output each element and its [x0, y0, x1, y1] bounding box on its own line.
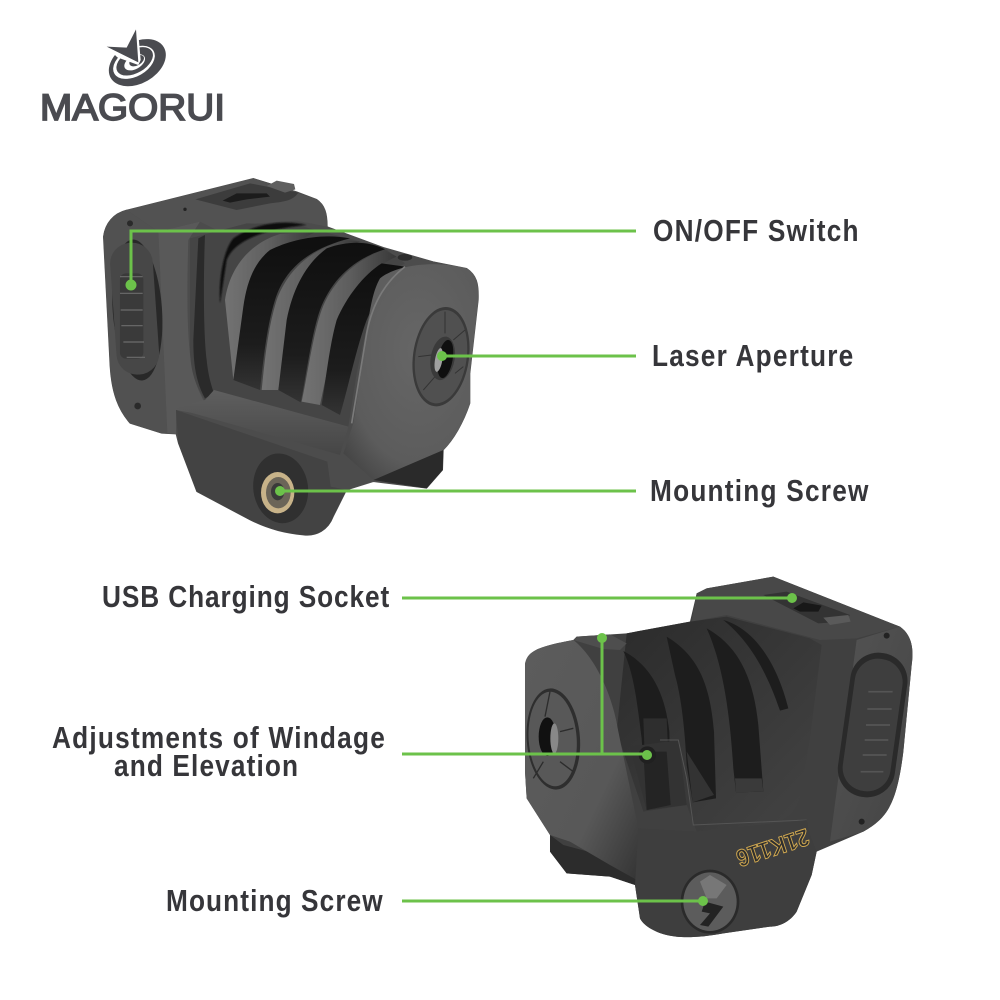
label: Adjustments of Windage and Elevation: Adjustments of Windage [52, 721, 385, 756]
callout: top mounting screw line [276, 488, 636, 494]
mounting screw [249, 450, 313, 527]
device: top laser view [103, 178, 478, 535]
front face [343, 264, 478, 480]
label: Mounting Screw top: Mounting Screw [650, 474, 869, 509]
left side panel [103, 210, 167, 433]
model marking 21K116: 21K116 [733, 823, 812, 871]
callout lines [127, 231, 796, 904]
top adjustment screw [398, 254, 412, 261]
base band [176, 390, 348, 455]
rail fins [220, 223, 405, 415]
logo target icon [100, 29, 174, 96]
side screws [127, 220, 141, 409]
body silhouette [525, 577, 912, 937]
label: Adjustments of Windage and Elevation [52, 721, 385, 784]
panel edge highlight [158, 222, 213, 434]
adjustment screw [630, 740, 687, 810]
logo wordmark: MAGORUI [40, 87, 225, 128]
top plate with USB cover [692, 577, 900, 640]
callout: USB socket line [402, 594, 796, 602]
face edge line [352, 267, 405, 423]
callout: ON/OFF switch line [127, 231, 636, 289]
label: Adjustments of Windage and Elevation: and Elevation [114, 749, 298, 784]
rail body [190, 223, 405, 427]
front face [525, 640, 640, 882]
label: USB Charging Socket: USB Charging Socket [102, 580, 390, 615]
side screws [859, 633, 890, 825]
logo: MAGORUI [40, 29, 225, 128]
top plate with USB cover [127, 178, 327, 237]
laser aperture [406, 303, 476, 410]
mounting screw [681, 870, 739, 934]
base band [635, 820, 817, 937]
laser aperture [523, 687, 583, 791]
windage screw top [573, 634, 627, 650]
callout: lower mounting screw line [402, 898, 706, 904]
dark channel near panel [193, 235, 214, 398]
lower mount [176, 410, 347, 535]
under rail [373, 450, 443, 488]
switch [834, 649, 911, 801]
label: Mounting Screw bottom: Mounting Screw [166, 884, 384, 919]
rail slots [623, 620, 788, 810]
callout: laser aperture line [438, 352, 636, 360]
body silhouette [103, 178, 478, 535]
rail body [617, 617, 822, 832]
label: Laser Aperture: Laser Aperture [652, 339, 853, 374]
ON/OFF switch [108, 238, 167, 382]
rail outline highlight [660, 740, 807, 825]
under rail [550, 835, 638, 885]
label: ON/OFF Switch: ON/OFF Switch [653, 214, 859, 249]
right side panel [830, 627, 912, 842]
callout: windage and elevation lines [402, 634, 650, 758]
device: bottom laser view [523, 577, 912, 937]
